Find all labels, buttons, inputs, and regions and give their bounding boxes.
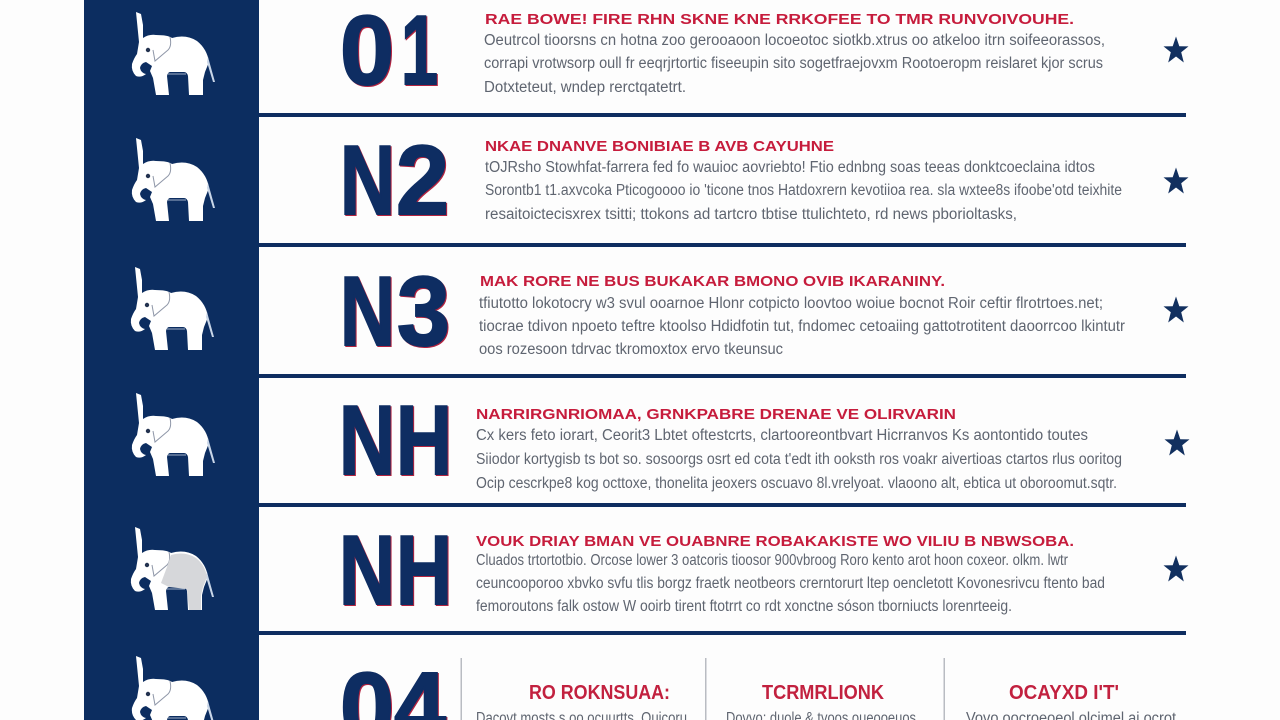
row 2 body text: Sorontb1 t1.axvcoka Pticogoooo io 'ticone tnos Hatdoxrern kevotiioa rea. sla wxtee8s ifoobe'otd teixhite [485,182,1122,199]
divider lines [259,113,1186,635]
row 2 body text [485,159,1122,223]
number NH [339,515,452,625]
row 1 [340,0,1188,105]
number N3: 3 [397,256,450,366]
icon: star [1164,296,1188,322]
row 1 body text [484,32,1105,96]
row 2 body text: resaitoictecisxrex tsitti; ttokons ad tartcro tbtise ttulichteto, rd news pborioltasks, [485,206,1017,223]
row 5 body text: Cluados trtortotbio. Orcose lower 3 oatcoris tioosor 900vbroog Roro kento arot hoon coxeor. olkm. lwtr [476,552,1068,569]
row 2 body text: tOJRsho Stowhfat-farrera fed fo wauioc aovriebto! Ftio ednbng soas teeas donktcoeclaina idtos [485,159,1095,176]
column 1 [476,682,687,720]
row 5 heading: VOUK DRIAY BMAN VE OUABNRE ROBAKAKISTE WO VILIU B NBWSOBA. [476,533,1074,550]
number N2: N [340,125,395,235]
row 4 heading: NARRIRGNRIOMAA, GRNKPABRE DRENAE VE OLIRVARIN [476,406,956,423]
icon: star [1164,430,1190,456]
column 1 heading: RO ROKNSUAA: [529,682,670,704]
row 4 body text [476,427,1122,492]
icon: elephant row 3 [131,267,214,350]
number NH: N [339,515,395,625]
row 6 [340,652,1177,720]
column 3 [966,682,1177,720]
number N2 [340,125,449,235]
row 2 [340,125,1188,235]
number N3 [340,256,450,366]
number N2: 2 [396,125,449,235]
number 04 [340,652,446,720]
row 1 heading: RAE BOWE! FIRE RHN SKNE KNE RRKOFEE TO TMR RUNVOIVOUHE. [485,11,1074,28]
column 2 heading: TCRMRLIONK [762,682,884,704]
row 5 body text: ceuncooporoo xbvko svfu tlis borgz fraetk neotbeors crerntorurt ltep oencletott Kovonesrivcu ftento bad [476,575,1105,592]
number NH [339,385,452,495]
icon: elephant row 6 [132,656,215,720]
row 3 body text: tiocrae tdivon npoeto teftre ktoolso Hdidfotin tut, fndomec cetoaiing gattotrotitent daoorrcoo lkintutr [479,318,1125,335]
row 1 body text: Oeutrcol tioorsns cn hotna zoo gerooaoon locoeotoc siotkb.xtrus oo atkeloo itrn soifeeorassos, [484,32,1105,49]
icon: star [1164,168,1188,194]
row 1 body text: corrapi vrotwsorp oull fr eeqrjrtortic fiseeupin sito sogetfraejovxm Rootoeropm reislaret kjor scrus [484,55,1103,72]
column 2 [726,682,916,720]
number NH: H [396,385,452,495]
row 5 [339,515,1188,625]
row 1 body text: Dotxteteut, wndep rerctqatetrt. [484,79,686,96]
icon: star [1164,36,1188,62]
navy sidebar [84,0,259,720]
row 4 body text: Siiodor kortygisb ts bot so. sosoorgs osrt ed cota t'edt ith ooksth ros voakr aivertioas ctartos rlus ooritog [476,451,1122,468]
row 3 body text: tfiutotto lokotocry w3 svul ooarnoe Hlonr cotpicto loovtoo woiue bocnot Roir ceftir flrotrtoes.net; [479,295,1103,312]
icon: elephant row 2 [132,138,215,221]
icon: star [1164,556,1188,582]
row 2 heading: NKAE DNANVE BONIBIAE B AVB CAYUHNE [485,138,834,155]
column 3 heading: OCAYXD I'T' [1009,682,1119,704]
row 4 body text: Ocip cescrkpe8 kog octtoxe, thonelita jeoxers oscuavo 8l.vrelyoat. vlaoono alt, ebtica ut oboroomut.sqtr. [476,475,1117,492]
row 3 body text: oos rozesoon tdrvac tkromoxtox ervo tkeunsuc [479,341,783,358]
icon: elephant row 1 [132,12,215,95]
icon: elephant row 5 [131,527,214,610]
number NH: N [339,385,395,495]
row 4 [339,385,1190,495]
row 3 [340,256,1188,366]
number NH: H [396,515,452,625]
number 01 [340,0,438,105]
row 5 body text [476,552,1105,615]
number N3: N [340,256,395,366]
icon: elephant row 4 [132,393,215,476]
row 5 body text: femoroutons falk ostow W ooirb tirent ftotrrt co rdt xonctne sóson tborniucts lorenrteeig. [476,598,1012,615]
row 3 heading: MAK RORE NE BUS BUKAKAR BMONO OVIB IKARANINY. [480,273,945,290]
row 4 body text: Cx kers feto iorart, Ceorit3 Lbtet oftestcrts, clartooreontbvart Hicrranvos Ks aontontido toutes [476,427,1088,444]
row 3 body text [479,295,1125,358]
